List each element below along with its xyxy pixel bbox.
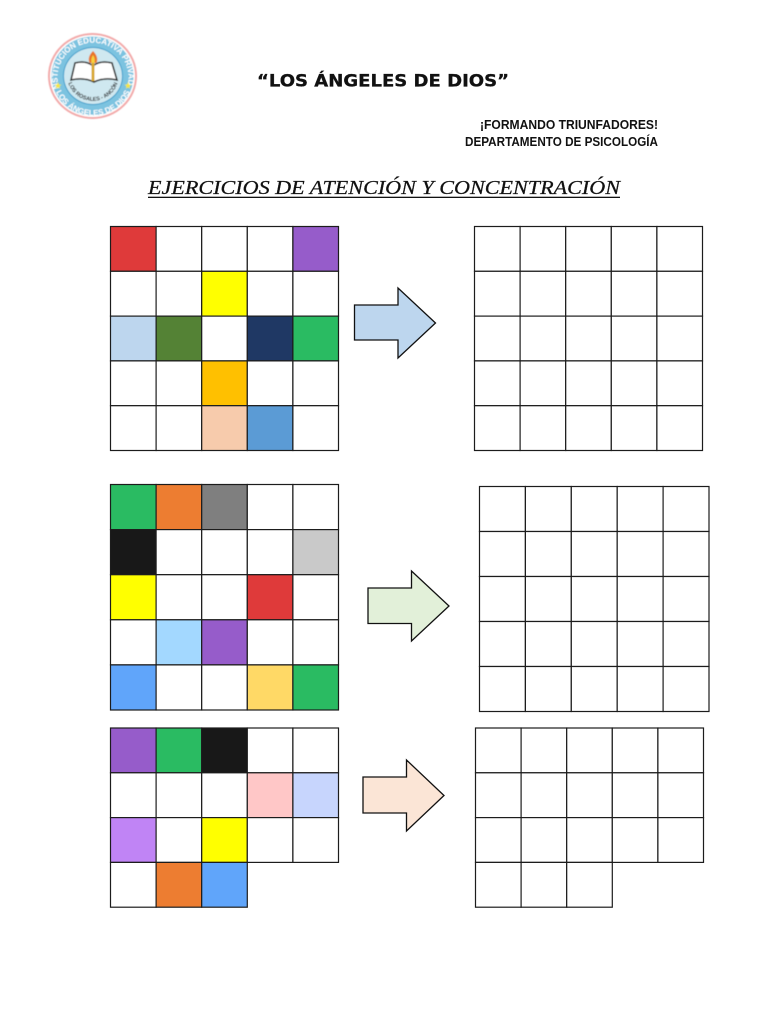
motto and department: DEPARTAMENTO DE PSICOLOGÍA [465,134,658,149]
panel: exercise 2 empty grid [480,486,709,712]
heading: EJERCICIOS DE ATENCIÓN Y CONCENTRACIÓN [147,175,622,199]
panel: exercise 1 empty grid [474,226,702,450]
arrow: exercise 1 [354,288,436,358]
arrow: exercise 3 [363,760,444,831]
motto and department [465,118,658,149]
panel: exercise 2 colored grid [110,484,338,710]
panel: exercise 1 colored grid [110,226,338,450]
icon: school logo: LOS ÁNGELES DE DIOS [56,89,130,116]
panel: exercise 3 empty grid [476,728,704,907]
icon: school logo: LOS ROSALES - ANCÓN [68,82,118,102]
panel: exercise 3 colored grid [110,728,338,907]
icon: school logo [48,32,138,120]
title: “LOS ÁNGELES DE DIOS” [257,72,509,90]
arrow: exercise 2 [368,571,449,641]
motto and department: ¡FORMANDO TRIUNFADORES! [480,118,658,132]
